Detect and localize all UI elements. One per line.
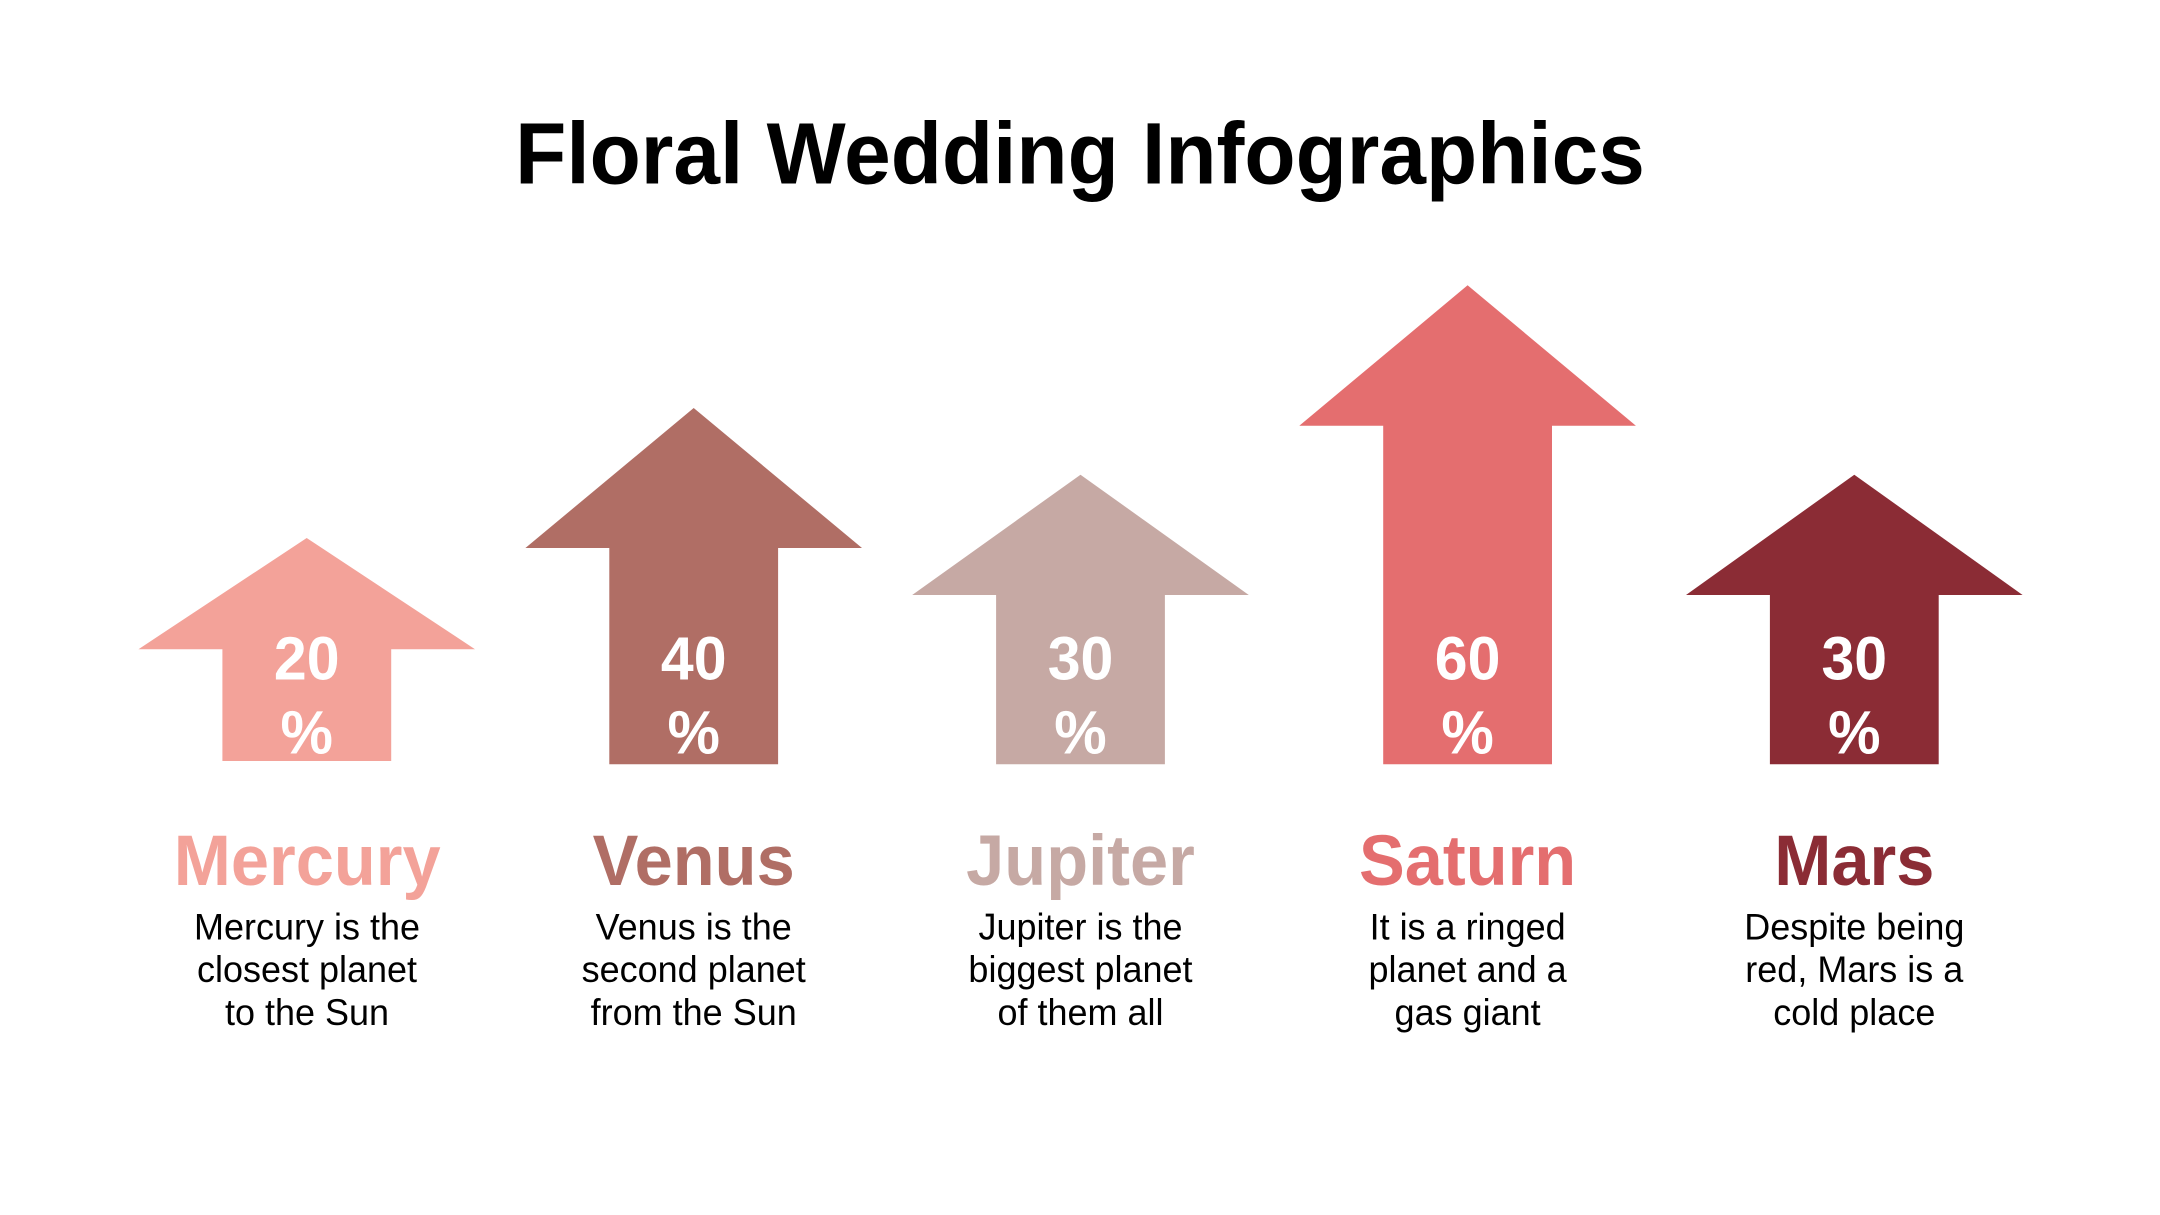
arrow: Jupiter 30% [912, 475, 1249, 764]
name: Mercury: Mercury [174, 821, 441, 900]
description: Saturn: planet and a [1369, 949, 1567, 990]
description: Jupiter: biggest planet [968, 949, 1193, 990]
description: Mars: red, Mars is a [1745, 949, 1964, 990]
arrow: Mercury 20% [138, 538, 475, 761]
description: Mercury: closest planet [197, 949, 417, 990]
arrow: Saturn 60% [1299, 285, 1636, 764]
description: Jupiter: Jupiter is the [978, 906, 1183, 947]
panel: Saturn [1299, 285, 1636, 1033]
panel: Venus [525, 408, 862, 1033]
arrow: Venus 40% [525, 408, 862, 764]
arrow: Mars 30% [1686, 475, 2023, 764]
title: Floral Wedding Infographics [515, 106, 1645, 203]
value: Mars: 30 [1821, 624, 1887, 693]
panel: Mercury [138, 538, 475, 1033]
value: Jupiter: 30 [1048, 624, 1113, 693]
description: Jupiter: of them all [997, 991, 1164, 1033]
description: Mercury: to the Sun [225, 991, 389, 1033]
panel: Jupiter [912, 475, 1249, 1033]
description: Venus: Venus is the [596, 906, 792, 947]
value: Mercury: % [280, 698, 333, 767]
value: Saturn: 60 [1435, 624, 1500, 693]
value: Mercury: 20 [274, 624, 340, 693]
description: Mercury: Mercury is the [194, 906, 420, 947]
name: Jupiter: Jupiter [966, 821, 1195, 900]
value: Venus: 40 [661, 624, 727, 693]
description: Saturn: gas giant [1395, 991, 1541, 1033]
name: Venus: Venus [593, 821, 795, 900]
value: Venus: % [667, 698, 720, 767]
description: Saturn: It is a ringed [1370, 906, 1566, 947]
panel: Mars [1686, 475, 2023, 1033]
description: Venus: from the Sun [591, 991, 797, 1033]
description: Venus: second planet [582, 949, 806, 990]
name: Mars: Mars [1774, 821, 1934, 900]
value: Jupiter: % [1054, 698, 1107, 767]
description: Mars: cold place [1773, 991, 1935, 1033]
description: Mars: Despite being [1744, 906, 1964, 947]
value: Mars: % [1828, 698, 1881, 767]
name: Saturn: Saturn [1359, 821, 1576, 900]
value: Saturn: % [1441, 698, 1494, 767]
